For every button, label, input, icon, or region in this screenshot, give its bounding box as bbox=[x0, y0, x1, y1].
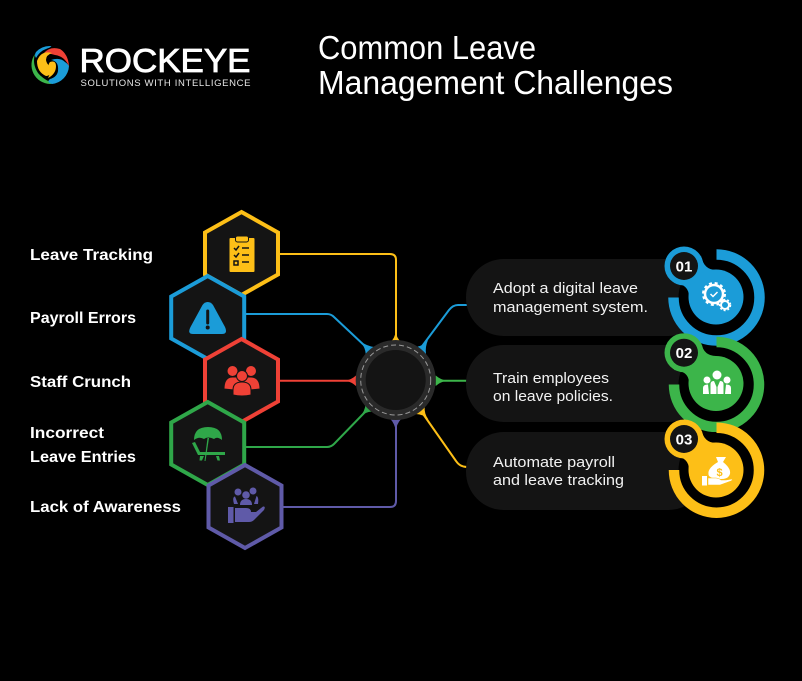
icon: money bag in hand: $ bbox=[716, 467, 723, 479]
solution 2 bbox=[466, 333, 759, 427]
pill: solution 3: and leave tracking bbox=[493, 472, 624, 489]
pill: solution 1: Adopt a digital leave bbox=[493, 280, 638, 297]
hexagon: staff crunch bbox=[205, 339, 278, 422]
pill: solution 3 bbox=[466, 432, 706, 510]
pill: solution 3: Automate payroll bbox=[493, 454, 615, 471]
title: Common Leave bbox=[318, 29, 536, 66]
challenge labels: Lack of Awareness bbox=[30, 499, 181, 516]
challenge labels: Payroll Errors bbox=[30, 310, 136, 327]
solution 1 bbox=[466, 246, 760, 340]
challenge labels: Leave Entries bbox=[30, 449, 136, 466]
title: Management Challenges bbox=[318, 64, 673, 101]
challenge labels: Leave Tracking bbox=[30, 247, 153, 264]
solution 3 bbox=[466, 420, 759, 513]
ring badge 01 bbox=[664, 246, 760, 340]
pill: solution 2 bbox=[466, 345, 706, 422]
pill: solution 2: on leave policies. bbox=[493, 388, 613, 405]
pill: solution 2: Train employees bbox=[493, 370, 609, 387]
logo: Rockeye bbox=[30, 42, 251, 89]
icon: warning triangle bbox=[189, 302, 226, 334]
icon: clipboard bbox=[230, 236, 254, 272]
hexagon: payroll errors bbox=[171, 276, 244, 359]
logo: Rockeye: ROCKEYE bbox=[80, 42, 251, 79]
central hub bbox=[356, 340, 436, 420]
ring badge 02: 02 bbox=[676, 345, 692, 362]
icon: beach chair and umbrella bbox=[192, 427, 225, 461]
challenge labels: Staff Crunch bbox=[30, 374, 131, 391]
hexagon: leave tracking bbox=[205, 212, 278, 295]
ring badge 03: 03 bbox=[676, 432, 692, 448]
hexagon: incorrect leave entries bbox=[171, 402, 244, 485]
title bbox=[318, 29, 673, 101]
ring badge 03 bbox=[664, 420, 759, 513]
ring badge 01: 01 bbox=[676, 258, 692, 276]
connectors and arrowheads bbox=[244, 254, 467, 507]
ring badge 02 bbox=[664, 333, 759, 427]
hexagon: lack of awareness bbox=[208, 465, 282, 548]
pill: solution 1 bbox=[466, 259, 706, 336]
icon: team bbox=[703, 370, 731, 394]
icon: gears bbox=[703, 283, 730, 310]
challenge labels bbox=[30, 247, 181, 516]
logo: Rockeye: SOLUTIONS WITH INTELLIGENCE bbox=[80, 78, 250, 89]
icon: hand holding people bbox=[228, 488, 265, 523]
challenge labels: Incorrect bbox=[30, 425, 105, 442]
icon: people group bbox=[224, 366, 260, 396]
pill: solution 1: management system. bbox=[493, 299, 648, 316]
